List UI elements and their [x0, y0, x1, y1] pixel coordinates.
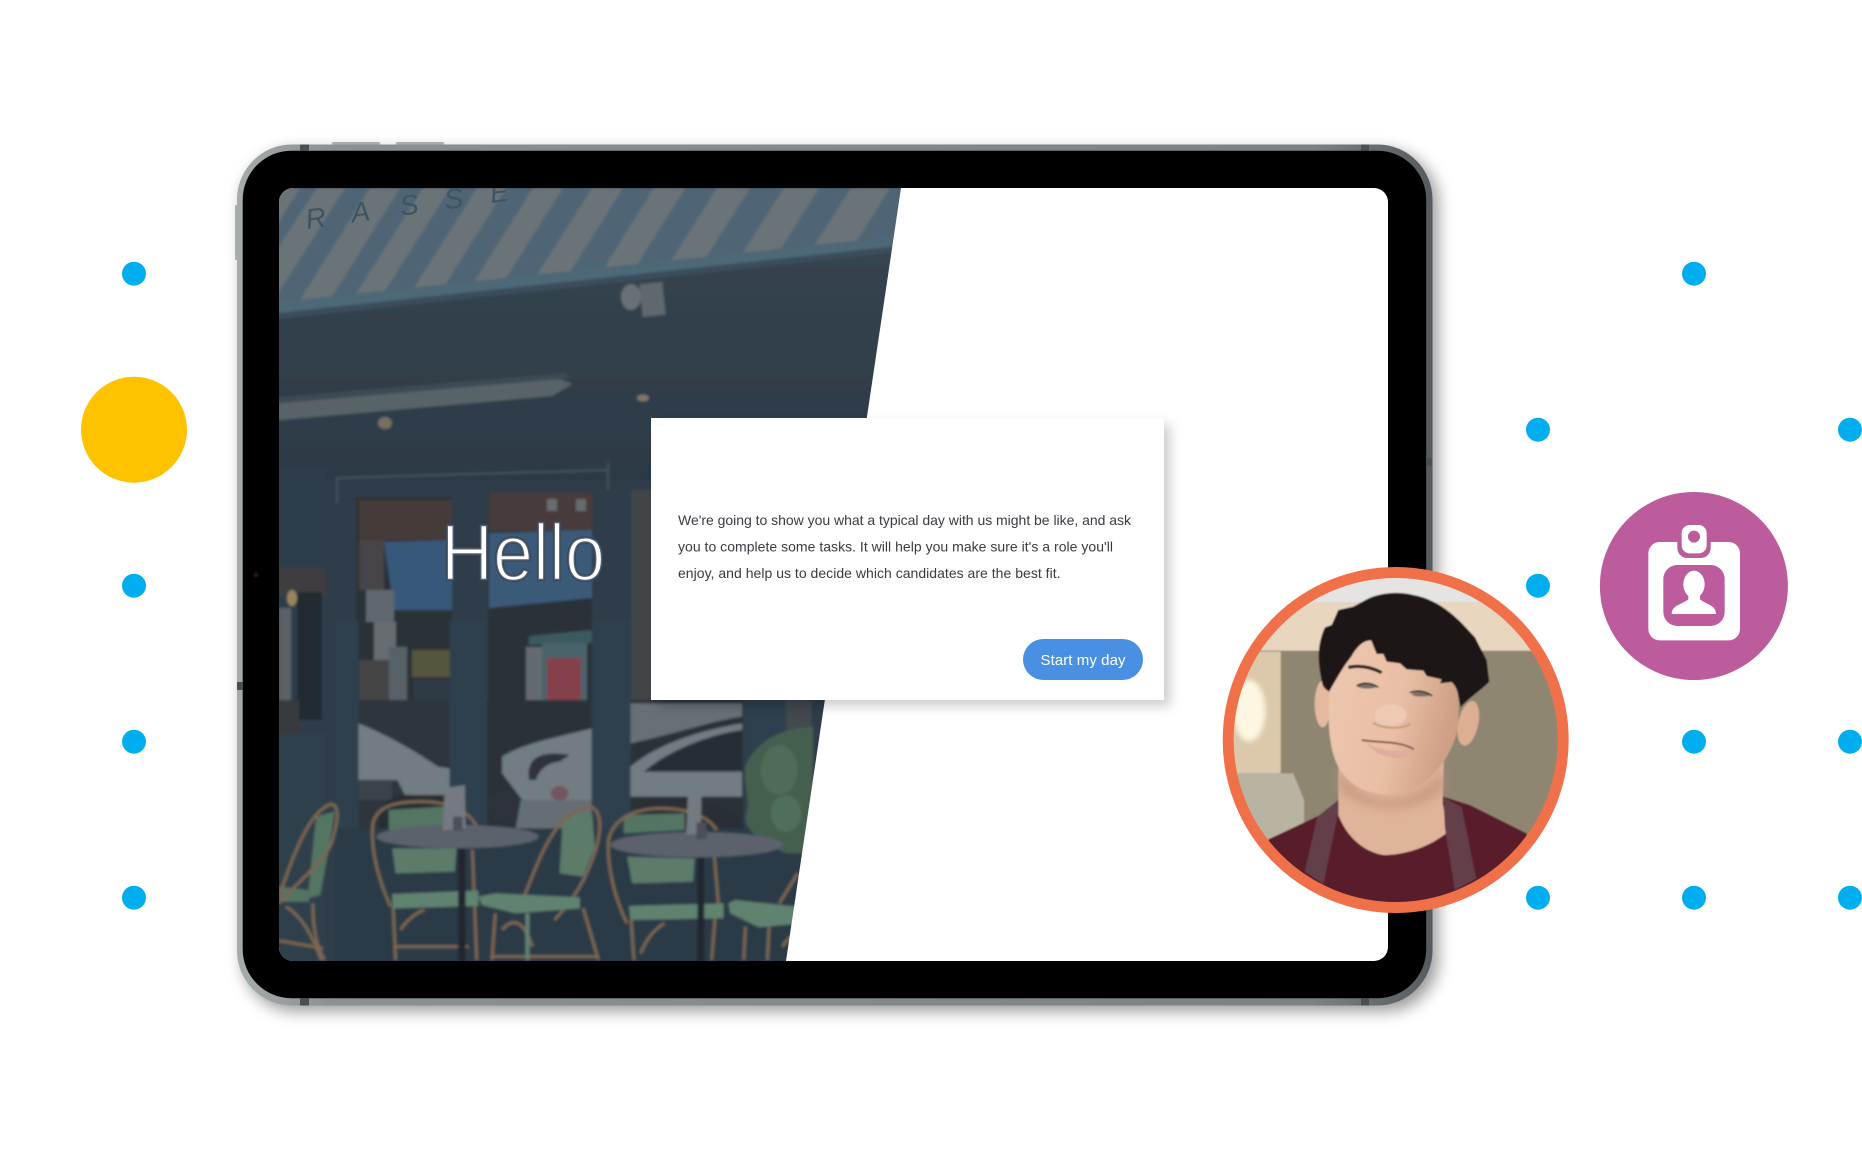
portrait ring — [1228, 572, 1563, 908]
person portrait — [1228, 572, 1563, 917]
neck — [1338, 757, 1448, 855]
chair D — [608, 808, 723, 960]
card text — [678, 512, 1132, 581]
card text: enjoy, and help us to decide which candidates are the best fit. — [678, 565, 1060, 581]
window pane 1 — [356, 497, 454, 702]
neck shadow — [1336, 773, 1446, 810]
badge icon — [1600, 492, 1788, 680]
camera dot — [254, 572, 258, 578]
mouth — [1368, 744, 1406, 758]
card text: you to complete some tasks. It will help you make sure it's a role you'll — [678, 538, 1113, 554]
awning lettering: BRASSE — [258, 176, 511, 241]
apron straps — [1305, 800, 1338, 884]
decorative dot: left column top — [122, 262, 146, 286]
shirt — [1268, 796, 1528, 902]
table tops — [376, 825, 539, 848]
cafe photo — [279, 188, 901, 961]
chair B — [372, 802, 478, 960]
reflected cars — [358, 699, 408, 723]
plant — [745, 727, 813, 853]
chair C — [478, 807, 600, 960]
wall camera — [621, 282, 666, 317]
portrait photo — [1234, 578, 1532, 902]
button: Start my day — [1023, 639, 1143, 680]
pillars — [356, 620, 786, 828]
eyebrows — [1348, 666, 1382, 673]
chair A — [279, 804, 337, 960]
awning — [279, 188, 901, 319]
fascia — [270, 252, 900, 480]
eyes — [1357, 683, 1432, 697]
decorative dot: left column middle — [122, 574, 146, 598]
decorative dots: right grid — [1526, 262, 1862, 910]
menu holders — [443, 785, 466, 831]
ID badge glyph — [1648, 521, 1740, 640]
strip light — [270, 373, 572, 421]
lower photo section — [279, 620, 813, 963]
decorative dot: left column lower — [122, 730, 146, 754]
tablet side buttons — [235, 142, 444, 260]
tablet screen — [279, 188, 1388, 961]
card panel — [651, 418, 1164, 700]
rim notches — [237, 144, 1432, 1006]
window pane 2 — [488, 492, 594, 702]
chair E — [729, 873, 798, 960]
lower dado — [384, 827, 711, 832]
tablet metal rim — [237, 144, 1432, 1006]
face — [1329, 640, 1459, 794]
nose — [1375, 704, 1407, 726]
yellow circle — [81, 377, 187, 483]
table pedestals — [458, 847, 466, 962]
button: Start my day: Start my day — [1040, 652, 1126, 669]
window pane 3 — [631, 490, 661, 700]
left wall — [279, 568, 326, 721]
card text: We're going to show you what a typical day with us might be like, and ask — [678, 512, 1132, 528]
tablet black bezel — [243, 151, 1426, 998]
ears — [1315, 681, 1331, 727]
hair — [1319, 593, 1489, 707]
tablet device — [190, 142, 1438, 1011]
decorative dot: left column bottom — [122, 886, 146, 910]
welcome card — [651, 418, 1170, 706]
window frame — [337, 463, 608, 503]
ceiling spot lights — [378, 417, 392, 429]
heading: Hello: Hello — [441, 508, 605, 597]
